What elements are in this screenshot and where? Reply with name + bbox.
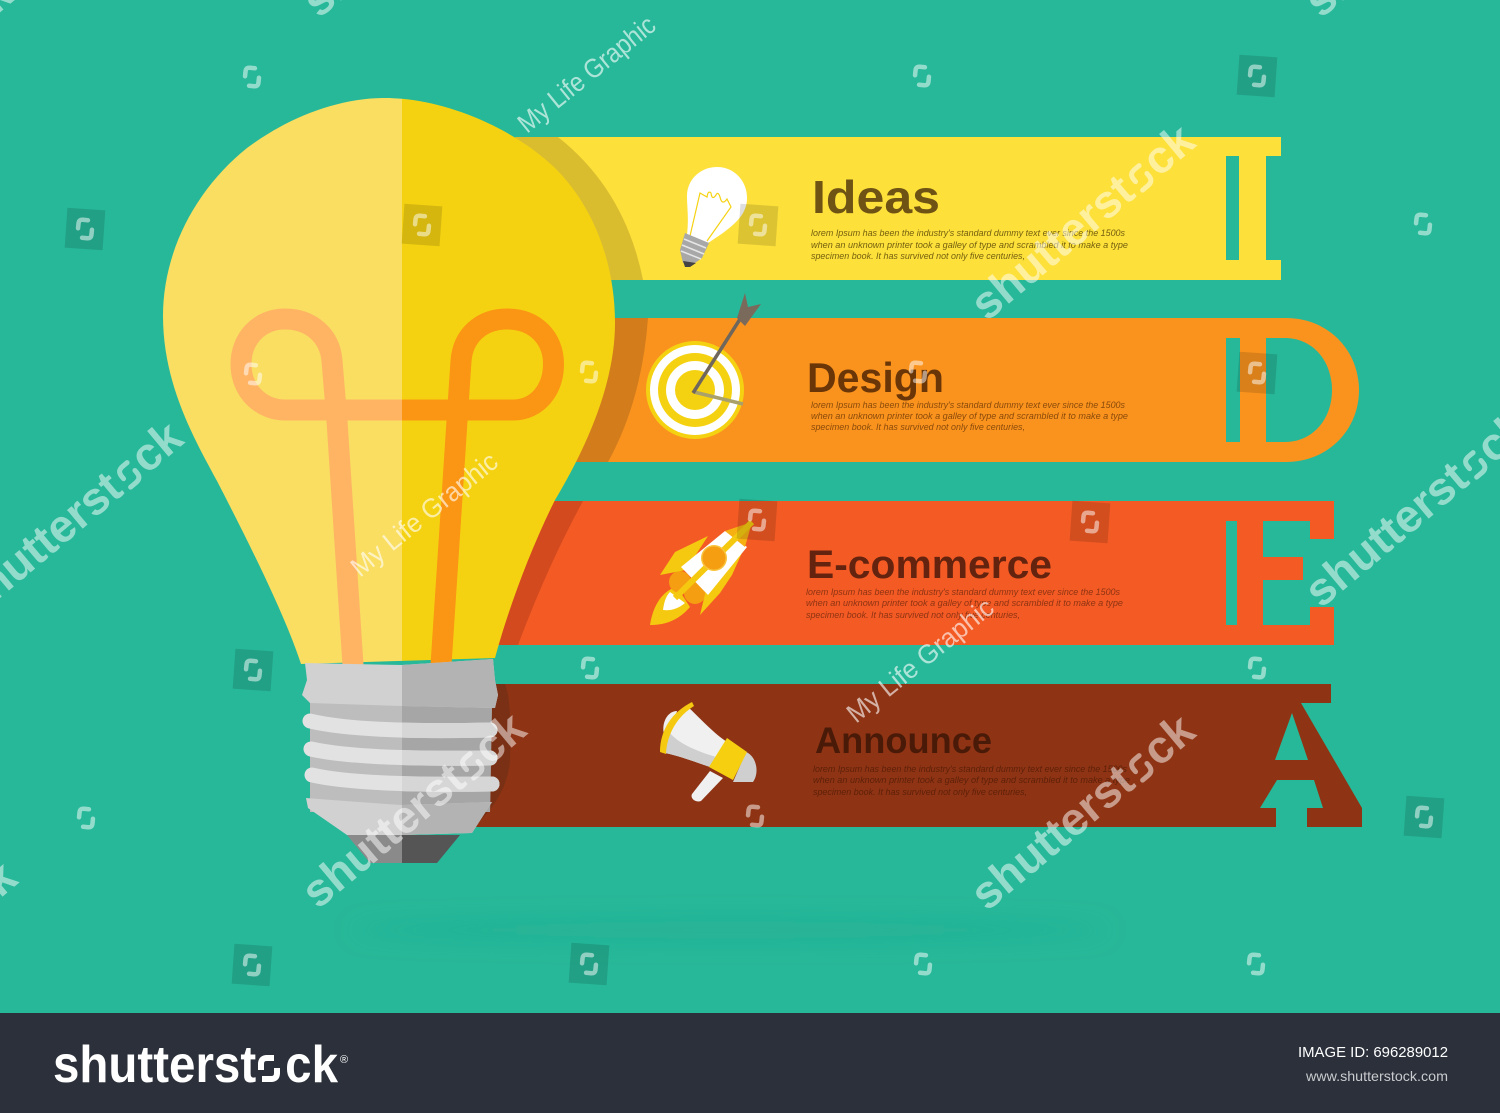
panel: Announce: [470, 684, 1362, 827]
icon: rocket: [650, 522, 752, 625]
website: www.shutterstock.com: [1305, 1068, 1448, 1084]
panel: Design: [570, 293, 1359, 462]
footer bar: [0, 1013, 1500, 1113]
text block: Ideas: when an unknown printer took a galley of type and scrambled it to make a type: [811, 240, 1128, 250]
text block: E-commerce: specimen book. It has survived not only five centuries,: [806, 610, 1020, 620]
bulb glass right half: [402, 98, 615, 661]
text block: Announce: lorem Ipsum has been the industry's standard dummy text ever since the 1500s: [813, 764, 1127, 774]
panel: Ideas: [515, 137, 1281, 280]
heading: Design: Design: [807, 354, 944, 401]
text block: Design: when an unknown printer took a galley of type and scrambled it to make a type: [811, 411, 1128, 421]
watermark: shutterstock: shutterstock: [960, 703, 1204, 920]
ribbon with letter I: [530, 137, 1281, 280]
watermark: My Life Graphic: My Life Graphic: [841, 592, 1000, 729]
watermark: shutterstock: shutterstock: [291, 701, 535, 918]
watermark: My Life Graphic: My Life Graphic: [512, 10, 661, 139]
text block: E-commerce: when an unknown printer took a galley of type and scrambled it to make a type: [806, 598, 1123, 608]
bulb shadow on ribbon: [570, 318, 648, 462]
bulb glass left half: [163, 98, 402, 664]
screw base: [302, 659, 498, 863]
text block: E-commerce: lorem Ipsum has been the industry's standard dummy text ever since the 1500s: [806, 587, 1120, 597]
filament right half: [402, 308, 564, 663]
watermark: My Life Graphic: My Life Graphic: [345, 446, 504, 583]
ribbon with letter A: [470, 684, 1362, 827]
bulb shadow on ribbon: [470, 684, 510, 827]
panel: E-commerce: [498, 501, 1334, 645]
text block: Ideas: lorem Ipsum has been the industry's standard dummy text ever since the 1500s: [811, 228, 1125, 238]
image id: IMAGE ID: 696289012: [1298, 1044, 1448, 1061]
text block: Design: specimen book. It has survived not only five centuries,: [811, 422, 1025, 432]
text block: E-commerce: [806, 587, 1123, 620]
ribbon with letter E: [500, 501, 1334, 645]
text block: Ideas: [811, 228, 1128, 261]
text block: Announce: specimen book. It has survived not only five centuries,: [813, 787, 1027, 797]
text block: Design: [811, 400, 1128, 432]
watermark: bracket marks: [77, 66, 1432, 975]
icon: light bulb: [680, 167, 747, 267]
watermark: My Life Graphic: [345, 10, 1000, 729]
icon: large light bulb: [163, 98, 615, 863]
ribbon with letter D: [590, 318, 1359, 462]
text block: Ideas: specimen book. It has survived not only five centuries,: [811, 251, 1025, 261]
bulb shadow on ribbon: [498, 501, 583, 645]
text block: Design: lorem Ipsum has been the industry's standard dummy text ever since the 1500s: [811, 400, 1125, 410]
bulb shadow on ribbon: [515, 137, 643, 280]
icon: megaphone: [660, 702, 757, 801]
text block: Announce: [813, 764, 1130, 797]
watermark: squares: [65, 55, 1444, 986]
heading: E-commerce: E-commerce: [807, 543, 1052, 587]
text block: Announce: when an unknown printer took a galley of type and scrambled it to make a type: [813, 775, 1130, 785]
registered mark: ®: [340, 1054, 348, 1066]
heading: Ideas: Ideas: [812, 171, 940, 223]
icon: target with arrow: [646, 293, 761, 439]
ground shadow: [350, 920, 1110, 940]
footer logo: shutterstock: [53, 1036, 338, 1094]
watermark: shutterstock: shutterstock: [960, 113, 1204, 330]
heading: Announce: Announce: [815, 720, 992, 761]
filament left half: [230, 308, 402, 664]
